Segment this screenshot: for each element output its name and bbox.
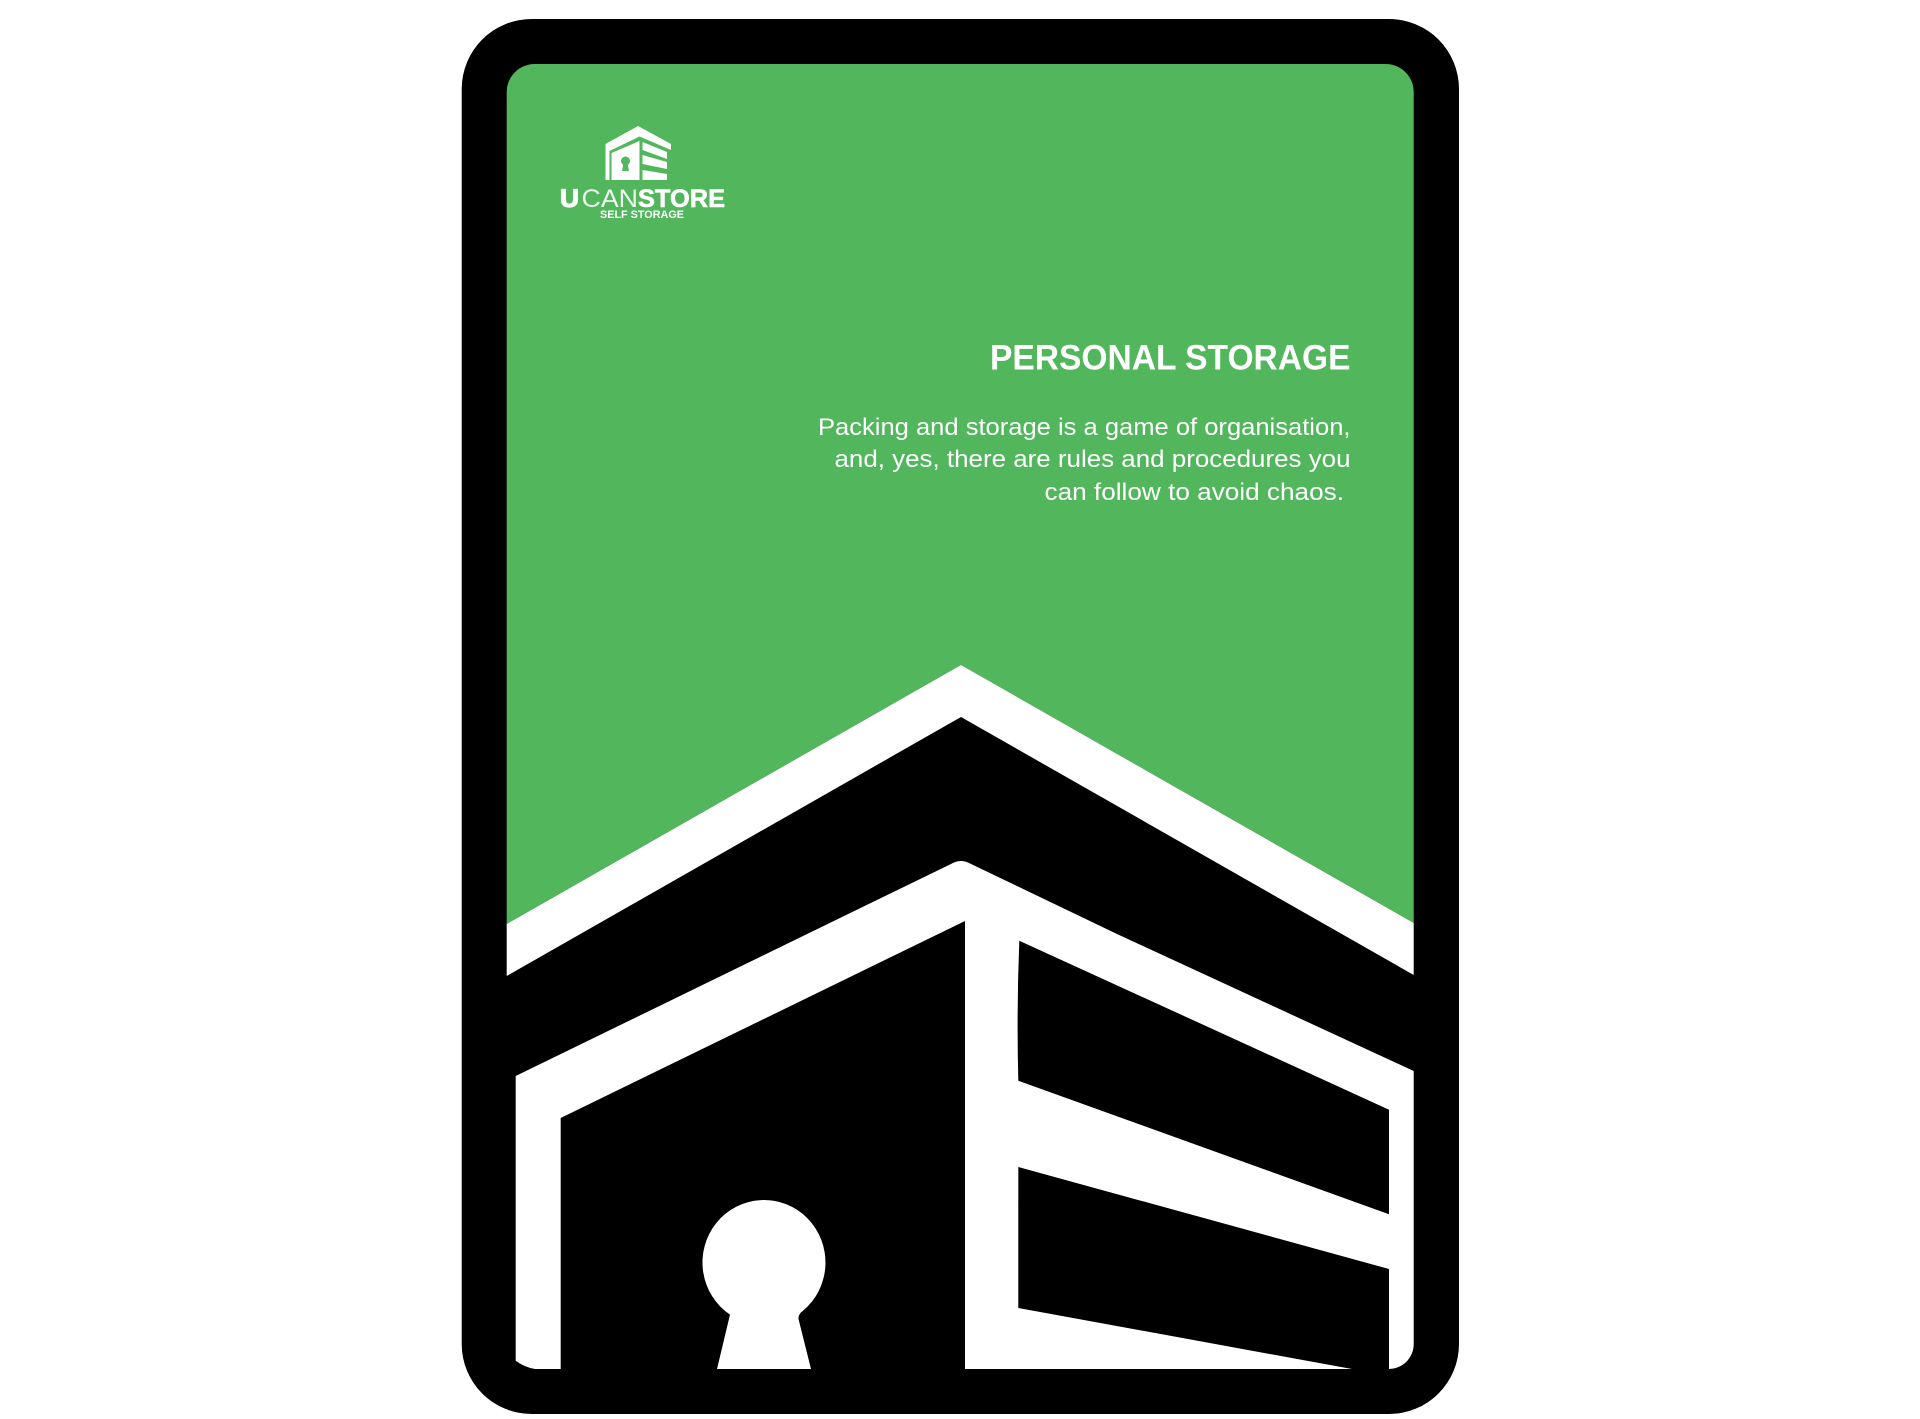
logo wordmark <box>560 185 725 213</box>
upper shutter slat <box>1018 941 1389 1214</box>
logo wordmark: STORE <box>638 185 725 213</box>
panel: green header with chevron bottom <box>507 64 1414 924</box>
logo wordmark: U <box>560 185 579 213</box>
text block: introduction <box>818 414 1350 506</box>
building body <box>516 861 1414 1369</box>
panel: black rounded frame <box>462 19 1459 1414</box>
logo wordmark: CAN <box>582 185 638 213</box>
text block: introduction: can follow to avoid chaos. <box>1044 479 1344 506</box>
logo: UCANSTORE self storage <box>560 126 725 221</box>
icon: storage unit logo mark <box>606 126 671 180</box>
icon: keyhole <box>702 1200 825 1369</box>
storage door <box>561 921 965 1369</box>
white roof chevron band <box>507 665 1414 976</box>
text block: introduction: and, yes, there are rules and procedures you <box>834 446 1350 473</box>
logo tagline: SELF STORAGE <box>600 209 684 221</box>
illustration: storage building <box>516 861 1414 1369</box>
title: PERSONAL STORAGE <box>990 338 1350 378</box>
text block: introduction: Packing and storage is a game of organisation, <box>818 414 1350 441</box>
lower shutter slat <box>1018 1167 1389 1369</box>
